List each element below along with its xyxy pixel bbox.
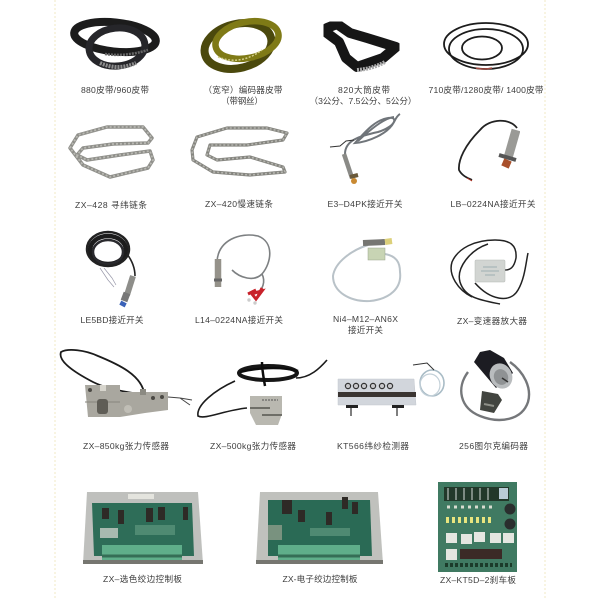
- item: 256 encoder: [459, 350, 529, 451]
- label: ZX-电子绞边控制板: [282, 573, 358, 584]
- icon: black timing belts: [73, 18, 157, 69]
- label: 256图尔克编码器: [459, 440, 528, 451]
- icon: chain: [192, 128, 287, 175]
- item: E3-D4PK sensor: [328, 114, 403, 209]
- label line 1: 820大筒皮带: [338, 84, 390, 95]
- item: ZX-420 chain: [192, 128, 287, 209]
- icon: proximity sensor with black cable: [459, 121, 517, 181]
- item: ZX-500kg sensor: [198, 360, 327, 451]
- label: ZX–选色绞边控制板: [103, 573, 182, 584]
- icon: proximity sensor with grey cable: [330, 114, 400, 184]
- item: L14-0224NA sensor: [195, 235, 283, 325]
- item: ZX-850kg load cell: [61, 350, 192, 451]
- label: LE5BD接近开关: [80, 314, 144, 325]
- item: LB-0224NA sensor: [450, 121, 536, 209]
- icon: chain: [70, 127, 153, 177]
- icon: thin belts: [444, 23, 528, 69]
- icon: brake circuit board: [438, 482, 517, 572]
- icon: S-type load cell with black coil: [198, 360, 327, 425]
- item: ZX speed amplifier: [451, 240, 528, 326]
- label: KT566纬纱检测器: [337, 440, 409, 451]
- item: electronic edge control board: [256, 492, 383, 584]
- icon: wide black belt: [327, 24, 396, 70]
- label: L14–0224NA接近开关: [195, 314, 283, 325]
- item: LE5BD sensor: [80, 232, 144, 325]
- icon: sensor with grey cable and red terminals: [214, 235, 270, 305]
- item: ZX-KT5D-2 brake board: [438, 482, 517, 585]
- icon: circuit board on metal plate: [256, 492, 383, 564]
- label: LB–0224NA接近开关: [450, 198, 536, 209]
- item: KT566 yarn detector: [337, 363, 444, 451]
- icon: tension sensor bar: [61, 350, 192, 417]
- icon: amplifier box with wire loop: [451, 240, 528, 304]
- label line 2: （3公分、7.5公分、5公分）: [310, 96, 416, 106]
- label: ZX–850kg张力传感器: [83, 440, 169, 451]
- label line 1: （宽窄）编码器皮带: [204, 84, 283, 95]
- item: encoder belt: [200, 16, 283, 106]
- label: 710皮带/1280皮带/ 1400皮带: [428, 84, 544, 95]
- label: ZX–变速器放大器: [457, 315, 527, 326]
- label line 2: （带钢丝）: [221, 95, 263, 106]
- item: color edge control board: [83, 492, 203, 584]
- label: ZX–KT5D–2刹车板: [440, 574, 516, 585]
- label: ZX–428 寻纬链条: [75, 199, 147, 210]
- item: 880/960 belts: [73, 18, 157, 95]
- icon: rotary encoder: [461, 350, 529, 420]
- label: 880皮带/960皮带: [81, 84, 149, 95]
- item: Ni4-M12-AN6X sensor: [333, 241, 400, 335]
- item: 820 wide belts: [310, 24, 416, 106]
- label line 1: Ni4–M12–AN6X: [333, 314, 398, 324]
- label: ZX–500kg张力传感器: [210, 440, 296, 451]
- label line 2: 接近开关: [348, 324, 383, 335]
- label: ZX–420慢速链条: [205, 198, 273, 209]
- icon: olive timing belts: [200, 16, 282, 76]
- icon: sensor with light cable loop: [333, 241, 400, 301]
- icon: sensor with coiled black cable: [87, 232, 135, 306]
- item: ZX-428 chain: [70, 127, 153, 210]
- item: 710/1280/1400 belts: [428, 23, 544, 95]
- icon: detector panel: [338, 363, 444, 416]
- icon: circuit board on metal plate: [83, 492, 203, 564]
- label: E3–D4PK接近开关: [328, 198, 403, 209]
